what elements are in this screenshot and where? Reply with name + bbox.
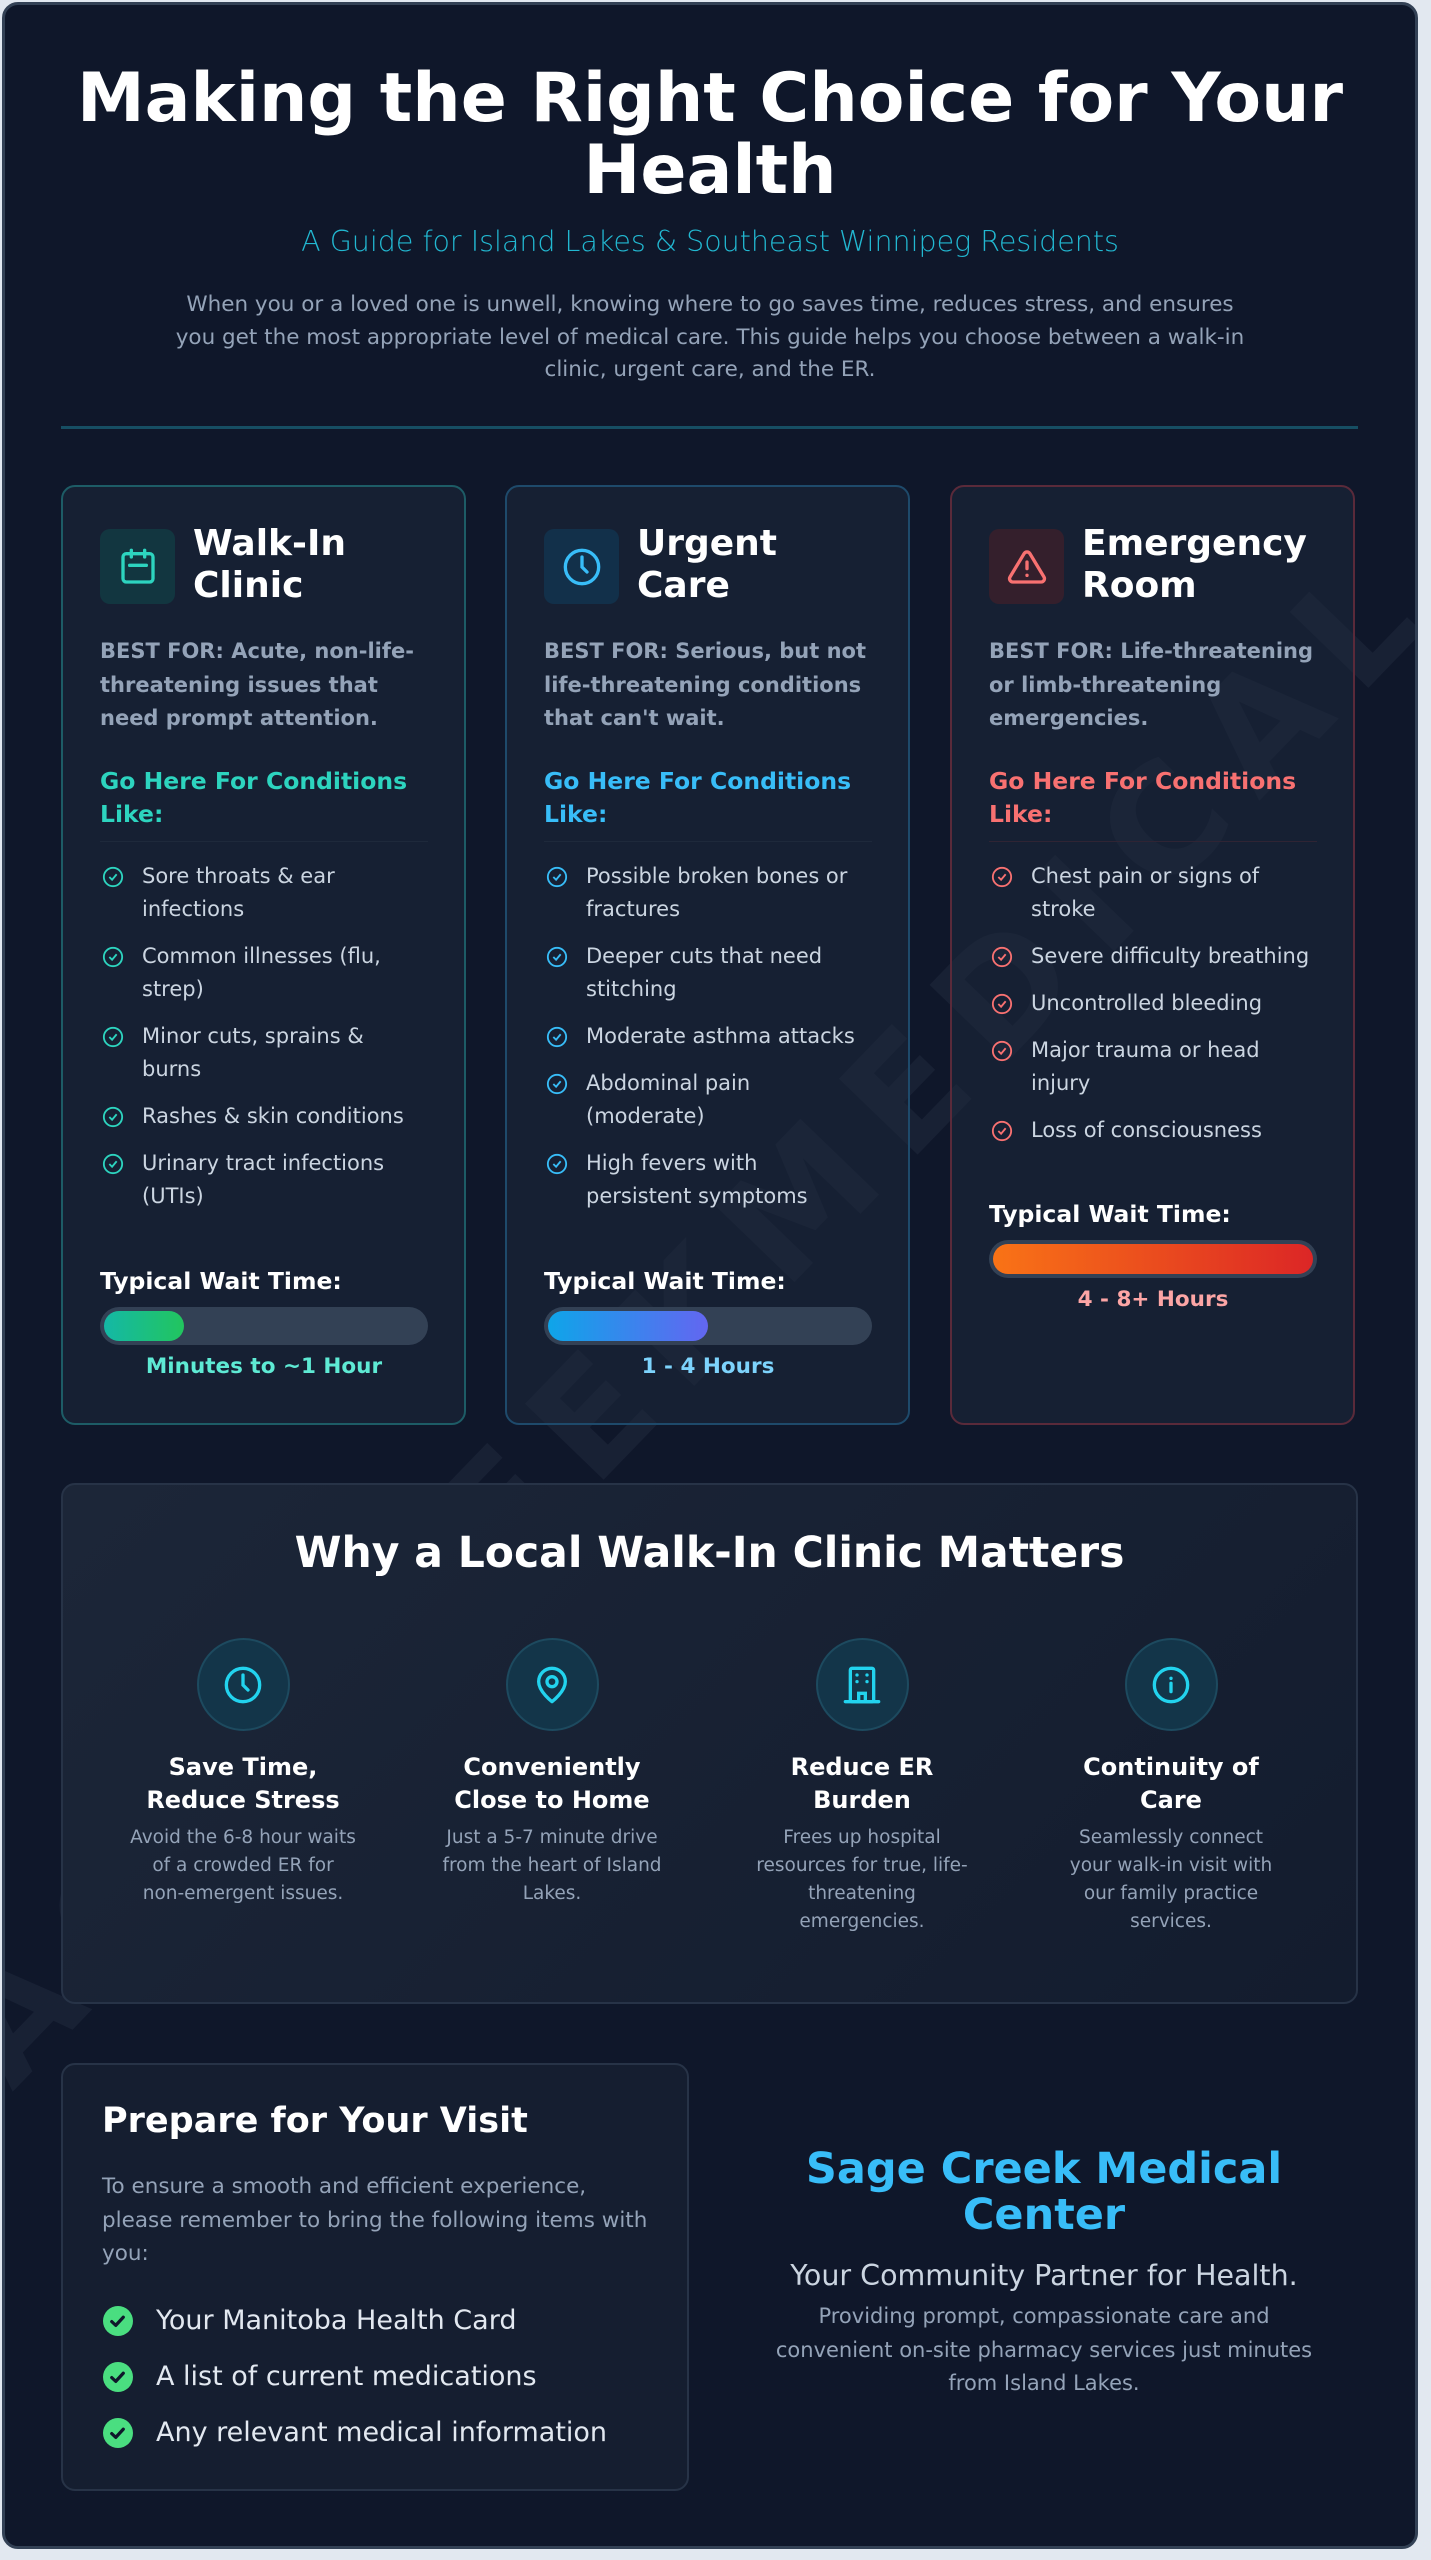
conditions list: Chest pain or signs of [1031,864,1259,888]
wait time bar: Typical Wait Time: [100,1267,342,1295]
conditions list [102,864,404,1208]
benefit: reduce ER burden: emergencies. [799,1911,925,1932]
conditions list: Moderate asthma attacks [586,1024,855,1048]
benefit: continuity: your walk-in visit with [1070,1855,1272,1876]
benefit: close to home: Conveniently [463,1753,641,1781]
wait time bar: Typical Wait Time: [989,1200,1231,1228]
benefit: continuity: services. [1130,1911,1212,1932]
checklist: A list of current medications [156,2361,537,2392]
benefit: save time: Save Time, [169,1753,317,1781]
description: To ensure a smooth and efficient experience, please remember to bring the following items with you: [102,2174,647,2266]
benefit: reduce ER burden: Reduce ER [791,1753,933,1781]
wait time bar [100,1267,428,1379]
brand description: Providing prompt, compassionate care and convenient on-site pharmacy services just minutes from Island Lakes. [776,2304,1312,2395]
icon: clock [544,529,619,604]
conditions list: Minor cuts, sprains & [142,1024,364,1048]
conditions list: fractures [586,897,680,921]
conditions list: Deeper cuts that need [586,944,822,968]
panel: why local clinic matters [61,1483,1358,2004]
conditions list: Sore throats & ear [142,864,335,888]
tagline: Your Community Partner for Health. [790,2259,1298,2292]
heading: Prepare for Your Visit [102,2101,528,2141]
benefit: close to home: from the heart of Island [442,1855,662,1876]
conditions list: strep) [142,977,204,1001]
brand name [806,2144,1282,2240]
panel: urgent care: 1 - 4 Hours [642,1354,774,1379]
benefit: continuity: Care [1140,1786,1202,1814]
best for: BEST FOR: Acute, non-life-threatening issues that need prompt attention. [100,639,414,730]
best for: BEST FOR: Life-threatening or limb-threatening emergencies. [989,639,1313,730]
benefit: save time: of a crowded ER for [152,1855,334,1876]
panel: walk-in clinic [61,485,466,1425]
benefit: save time: non-emergent issues. [143,1883,343,1904]
panel: emergency room: 4 - 8+ Hours [1078,1287,1228,1312]
benefit: reduce ER burden [756,1638,968,1932]
heading: Urgent [637,523,777,564]
heading: Why a Local Walk-In Clinic Matters [295,1529,1124,1578]
heading: Clinic [193,565,303,606]
conditions list: injury [1031,1071,1090,1095]
conditions heading: Go Here For Conditions Like: [100,767,407,828]
conditions list: Severe difficulty breathing [1031,944,1309,968]
checklist [103,2305,607,2448]
heading: Emergency [1082,523,1307,564]
title [77,59,1343,210]
conditions list: (moderate) [586,1104,705,1128]
benefit: close to home: Just a 5-7 minute drive [446,1827,658,1848]
icon: warning [989,529,1064,604]
panel: prepare for your visit [61,2063,689,2491]
conditions list: persistent symptoms [586,1184,808,1208]
conditions list: stroke [1031,897,1096,921]
panel: emergency room [950,485,1355,1425]
conditions list: Uncontrolled bleeding [1031,991,1262,1015]
brand name: Sage Creek Medical [806,2144,1282,2194]
conditions list: Urinary tract infections [142,1151,384,1175]
benefit: reduce ER burden: Frees up hospital [783,1827,941,1848]
heading: Room [1082,565,1197,606]
conditions heading: Go Here For Conditions Like: [544,767,851,828]
title: Health [583,131,837,210]
conditions list: (UTIs) [142,1184,204,1208]
benefit: save time: Reduce Stress [146,1786,340,1814]
brand name: Center [963,2190,1125,2240]
benefit: save time [130,1638,356,1904]
benefit: continuity: Seamlessly connect [1079,1827,1263,1848]
conditions heading: Go Here For Conditions Like: [989,767,1296,828]
heading [1082,523,1307,606]
checklist: Your Manitoba Health Card [156,2305,516,2336]
subtitle: A Guide for Island Lakes & Southeast Winnipeg Residents [301,225,1119,258]
conditions list [546,864,855,1208]
heading: Walk-In [193,523,346,564]
wait time bar: Typical Wait Time: [544,1267,786,1295]
benefit: continuity [1070,1638,1272,1932]
conditions list: Loss of consciousness [1031,1118,1262,1142]
conditions list: Common illnesses (flu, [142,944,381,968]
checklist: Any relevant medical information [156,2417,607,2448]
best for: BEST FOR: Serious, but not life-threatening conditions that can't wait. [544,639,866,730]
conditions list: burns [142,1057,201,1081]
conditions list: Possible broken bones or [586,864,847,888]
heading: Care [637,565,730,606]
benefit: continuity: Continuity of [1083,1753,1259,1781]
conditions list: stitching [586,977,677,1001]
conditions list [992,864,1309,1142]
benefit: reduce ER burden: resources for true, life- [756,1855,968,1876]
benefit: reduce ER burden: threatening [808,1883,916,1904]
heading [193,523,346,606]
benefit: save time: Avoid the 6-8 hour waits [130,1827,356,1848]
conditions list: High fevers with [586,1151,757,1175]
wait time bar [544,1267,872,1379]
icon: calendar [100,529,175,604]
wait time bar [989,1200,1317,1312]
benefit: close to home [442,1638,662,1904]
brand block [776,2144,1312,2395]
panel: urgent care [505,485,910,1425]
heading [637,523,777,606]
conditions list: Rashes & skin conditions [142,1104,404,1128]
conditions list: infections [142,897,244,921]
title: Making the Right Choice for Your [77,59,1343,138]
panel: walk-in clinic: Minutes to ~1 Hour [146,1354,382,1379]
conditions list: Major trauma or head [1031,1038,1260,1062]
benefit: close to home: Close to Home [454,1786,650,1814]
intro text: When you or a loved one is unwell, knowing where to go saves time, reduces stress, and ensures you get the most appropriate level of medical care. This guide helps you choose between a walk-in clinic, urgent care, and the ER. [176,292,1244,382]
conditions list: Abdominal pain [586,1071,750,1095]
benefit: continuity: our family practice [1084,1883,1258,1904]
benefit: close to home: Lakes. [523,1883,581,1904]
benefit: reduce ER burden: Burden [813,1786,911,1814]
